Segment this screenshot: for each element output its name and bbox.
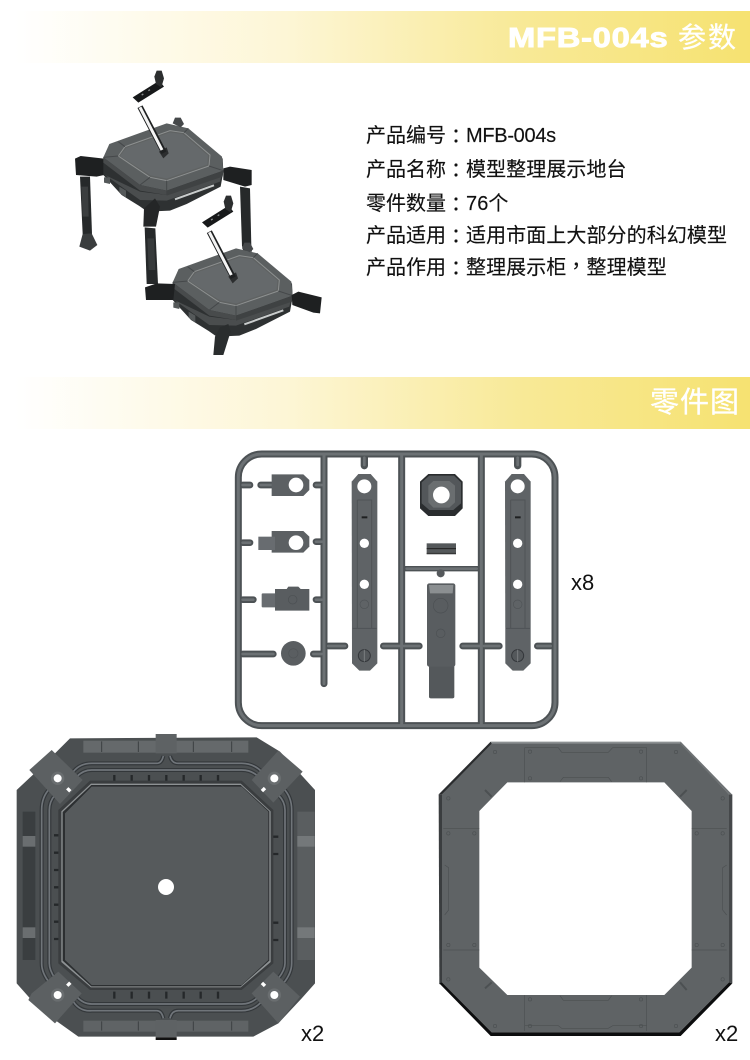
square column part: [427, 569, 455, 698]
spec line: part count: 零件数量：: [366, 193, 471, 215]
spec line: product use: 产品作用：: [366, 257, 471, 279]
octagonal top frame: [438, 742, 732, 1036]
runner highlights: [238, 454, 555, 726]
product specification list: 76个: [466, 193, 508, 215]
product render: two stacked display bases: [75, 70, 322, 355]
round disc part: [281, 641, 306, 666]
first base platform: [103, 71, 223, 212]
heading text: 参数: 参数: [678, 22, 738, 53]
groove highlights: [42, 756, 292, 1018]
spec line: product code: [366, 124, 556, 147]
centre hole: [158, 879, 174, 895]
octagonal nut part: [420, 474, 463, 516]
upper rear leg arm left: [75, 156, 104, 251]
runner frame and bars: [238, 454, 555, 726]
plate silhouette: [17, 737, 315, 1037]
long strut part left: [352, 474, 377, 671]
frame surface: [442, 742, 729, 1032]
top and bottom rails: [83, 734, 248, 1040]
corner mount top right: [252, 751, 303, 803]
parts runner sprue: [234, 450, 558, 730]
product specification list: MFB-004s: [466, 125, 556, 147]
second base platform: [173, 196, 293, 337]
quantity label x8: x8: [571, 570, 594, 595]
spec line: suitable for: [366, 224, 727, 247]
panel seams: [443, 748, 727, 1031]
quantity label x2 base: x2: [301, 1021, 324, 1046]
spec line: product use: [366, 250, 667, 279]
lower base arms: [213, 292, 322, 355]
product specification list: [366, 124, 727, 279]
product specification list: 整理展示柜，整理模型: [466, 250, 667, 279]
corner mount bottom left: [28, 972, 82, 1023]
small bar part: [427, 543, 456, 554]
main inner panel: [58, 781, 273, 990]
spec line: product name: 产品名称：: [366, 159, 471, 181]
connector block part: [262, 587, 309, 611]
middle lug part: [258, 531, 309, 553]
spec line: product code: 产品编号：: [366, 125, 471, 147]
top lug part: [272, 474, 309, 496]
rib ticks: [54, 775, 278, 999]
frame bevel edges: [439, 742, 732, 1036]
product specification list: 模型整理展示地台: [466, 159, 627, 181]
corner mount top left: [29, 750, 83, 804]
heading text: MFB-004s: MFB-004s: [508, 22, 668, 53]
spec line: product name: [366, 158, 627, 181]
front connecting leg: [143, 198, 175, 300]
base plate underside: [16, 734, 315, 1040]
long strut part right: [505, 474, 531, 671]
upper right leg arm: [223, 167, 252, 252]
spec line: suitable for: 产品适用：: [366, 225, 471, 247]
curved grooves: [42, 756, 292, 1018]
product specification list: 适用市面上大部分的科幻模型: [466, 225, 727, 247]
heading band: parts diagram: [0, 377, 750, 429]
heading band: parameters: [0, 11, 750, 63]
corner mount bottom right: [252, 972, 300, 1023]
heading text: 零件图: 零件图: [650, 387, 740, 419]
side channels: [23, 812, 315, 960]
quantity label x2 frame: x2: [715, 1021, 738, 1046]
